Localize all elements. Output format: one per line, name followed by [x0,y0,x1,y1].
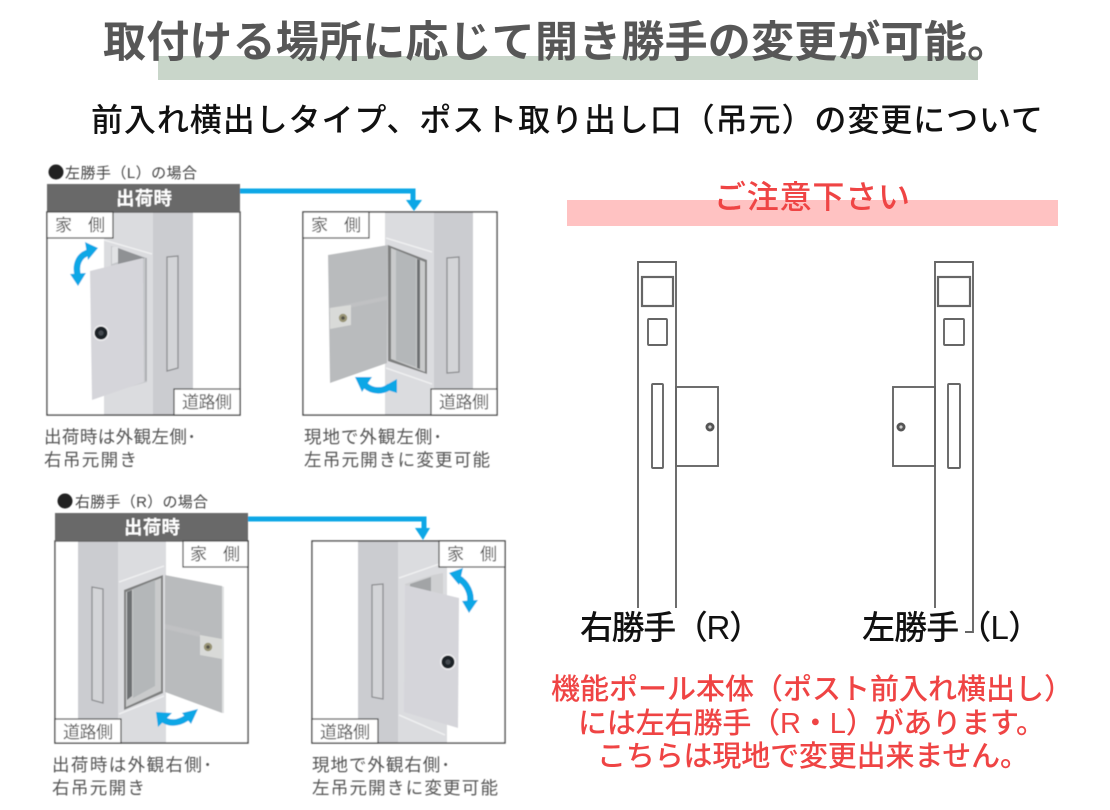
tag: house side [303,212,369,238]
caption: on-site L: 左吊元開きに変更可能 [304,450,490,470]
shipping header R [55,513,248,541]
photo: shipping state L [47,212,240,415]
tag: house side: 家 側 [55,216,105,235]
notice heading: ご注意下さい [714,179,910,215]
caption: on-site L: 現地で外観左側･ [304,427,442,447]
tag: road side [312,719,378,743]
tag: house side [47,212,113,238]
tag: house side: 家 側 [447,545,497,564]
photo: on-site state L [303,212,497,415]
panel: right-hand (R) case [52,494,505,798]
shipping header L: 出荷時 [116,188,172,209]
photo: on-site state R [312,541,505,743]
label: left hand: 左勝手（L） [862,609,1041,646]
caption: on-site R: 現地で外観右側･ [312,755,450,775]
tag: house side: 家 側 [190,545,240,564]
arrow: shipping to on-site [240,191,422,211]
tag: road side [431,389,497,415]
tag: house side: 家 側 [311,216,361,235]
caption: shipping R: 出荷時は外観右側･ [52,755,212,775]
subtitle: 前入れ横出しタイプ、ポスト取り出し口（吊元）の変更について [91,102,1043,138]
arrow: shipping to on-site [248,519,430,540]
icon: swing arrow [156,709,198,727]
caption: shipping L: 右吊元開き [44,450,137,470]
label: right hand: 右勝手（R） [580,609,762,646]
tag: road side: 道路側 [439,393,489,412]
shipping header R: 出荷時 [124,517,180,538]
diagram: right-hand post [638,262,718,608]
tag: road side: 道路側 [63,723,113,742]
tag: road side: 道路側 [320,723,370,742]
warning text: には左右勝手（R・L）があります。 [578,707,1045,740]
section label L: 左勝手（L）の場合 [65,165,197,182]
tag: road side [174,389,240,415]
tag: road side [55,719,121,743]
tag: house side [183,541,248,567]
title: 取付ける場所に応じて開き勝手の変更が可能。 [103,19,1010,67]
warning text: 機能ポール本体（ポスト前入れ横出し） [551,673,1073,706]
warning text [551,673,1073,773]
panel: left-hand (L) case [44,164,497,470]
warning text: こちらは現地で変更出来ません。 [597,740,1029,773]
caption: on-site R: 左吊元開きに変更可能 [312,778,498,798]
tag: house side [439,541,505,567]
photo: shipping state R [55,541,248,743]
caption: shipping R: 右吊元開き [52,778,145,798]
caption: shipping L: 出荷時は外観左側･ [44,427,196,447]
tag: road side: 道路側 [182,393,232,412]
icon: swing arrow [70,242,98,286]
notice band [567,200,1058,226]
icon: swing arrow [355,377,397,393]
shipping header L [47,184,240,212]
diagram: left-hand post [893,262,973,632]
section label R: 右勝手（R）の場合 [75,494,208,511]
icon: swing arrow [449,568,478,613]
title highlight band [158,56,978,80]
